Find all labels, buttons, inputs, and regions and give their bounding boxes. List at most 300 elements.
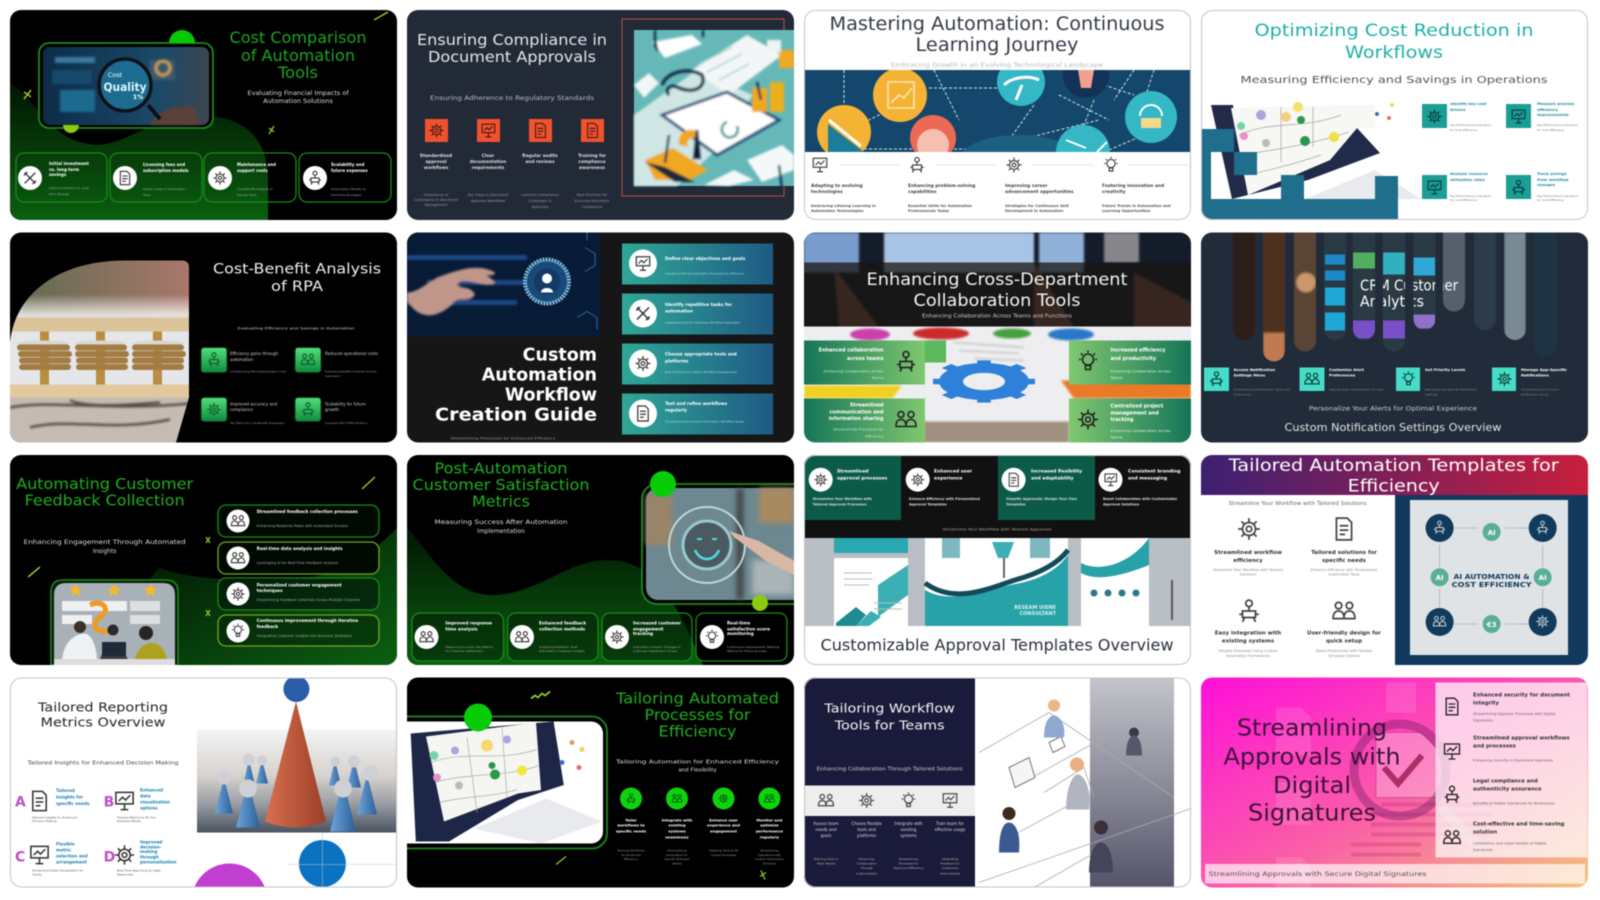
title: Document Approvals [428,48,596,66]
card: engagement tracking [602,613,692,661]
item: measure process: Key Performance Indicators [1537,123,1579,127]
item C: flexible metrics: selection and [56,854,88,858]
card: initial investment: term Savings [49,192,69,196]
item: measure process [1506,101,1579,132]
item: tailored solutions: Enhance Efficiency with Personalized [1311,568,1377,572]
item: adapting: Automation Technologies [811,209,864,213]
card: feedback collection [508,613,598,661]
image: brochure templates: CONSULTANT [1019,611,1057,617]
subtitle [615,760,780,774]
card: user experience [906,468,980,506]
item: tailored solutions: Automation Tools [1329,573,1360,577]
item: choose tools: Enhancing [859,857,875,861]
card: licensing fees: Tools [142,193,151,197]
item: tailor workflows: Efficiency [624,857,638,861]
card: branding: and messaging [1128,475,1167,481]
subtitle: Tailored Insights for Enhanced Decision Making [26,760,178,766]
item: tailor workflows [616,788,647,861]
item: career: Improving career [1005,183,1048,189]
title: Cost Comparison [230,28,366,47]
title [830,14,1164,56]
item D: personalization: decision- [140,844,162,850]
item: adapting: technologies [811,189,843,195]
title [823,700,955,732]
card: increased efficiency: Teams [1110,375,1123,380]
item: reduced costs: Evaluating Benefits of Robotic Process [325,370,377,374]
card: repetitive tasks [622,294,773,334]
icon: lime semicircle [63,125,79,133]
card: streamlined communication: communication and [829,410,884,416]
item: integrate systems: Streamlining [899,857,918,861]
image: laptop with workflow chart [387,716,607,848]
item: integrate systems: Automation for [666,853,689,857]
title [230,28,366,82]
item: reduced costs [295,348,378,378]
item B: data visualization: B [104,794,114,810]
item: app-specific notifications [1492,367,1568,396]
title: Enhancing Cross-Department [866,270,1128,290]
image: AI automation and cost efficiency board: AI [1539,574,1547,582]
card: real-time analysis: Leveraging AI for Real-Time Feedback Analysis [257,561,338,565]
panel: Tailored Reporting Metrics Overview [10,676,397,900]
image: hand touching smiley interface [642,484,812,604]
item: enhance experience: experience and [707,822,740,828]
item: adapting [811,158,876,213]
panel: Tailored Automation Templates for Efficiency [1201,455,1588,665]
item: integrate systems: Personalizing [667,848,687,852]
subtitle: Enhancing Engagement Through Automated [24,539,186,546]
card: approval processes [809,468,887,506]
item: standardized workflows [414,119,459,207]
icon: green circle [650,471,676,497]
card: scalability: One-Time Purchases [331,193,362,197]
panel: Custom Notification Settings Overview [1201,232,1588,442]
item: app-specific notifications: Manage App-Specific [1521,367,1568,372]
item: priority levels [1396,367,1478,396]
title [866,270,1128,311]
card: scalability: future expenses [331,168,368,173]
item D: personalization [104,840,177,876]
title: Approvals with [1224,744,1400,770]
item: access notification menu [1204,367,1290,396]
item: documentation requirements [468,119,509,203]
card: scalability: Subscription Models vs. [331,187,366,191]
card: enhanced collaboration: Teams [870,375,884,380]
subtitle: Tailoring Automation for Enhanced Efficiency [615,760,780,766]
item D: personalization: Responses [117,872,133,876]
title: Automating Customer [16,475,194,493]
item C: flexible metrics: Flexible [56,842,75,846]
subtitle: Measuring Efficiency and Savings in Operations [1240,75,1548,86]
card: centralized project management: tracking [1110,417,1134,423]
item: measure process: efficiency [1537,107,1558,112]
card: initial investment: Initial Investment vs. Long- [49,186,90,190]
item: innovation: Future Trends in Automation and [1102,204,1171,208]
subtitle: Implementation [477,528,525,535]
card: appropriate tools: Best Practices for Custom Workflow Development [665,370,738,374]
item: adapting: Embracing Lifelong Learning in [811,204,876,208]
item: tailored solutions: specific needs [1322,558,1367,564]
card: streamlined communication: Efficiency [865,434,884,438]
image: colleagues with gears on paper [804,232,1191,442]
title: Post-Automation [434,459,568,477]
title: Learning Journey [916,35,1079,56]
item: standardized workflows: Compliance in Document [414,198,459,202]
item: compliance training: Training for [578,153,607,159]
item C: flexible metrics: Streamlined Data Visualization for [32,868,84,872]
card: real-time analysis: Real-time data analysis and insights [257,546,343,551]
item: identify cost drivers: Key Performance Indicators [1450,123,1492,127]
item: cost-effective: Compliance and Legal Validity of Digital [1473,842,1546,846]
card: personalized engagement: Streamlining Feedback Collection Across Multiple Channels [257,598,360,602]
title: Customer Satisfaction [412,476,590,494]
panel: Cost Comparison of Automation Tools [10,10,397,220]
title: Feedback Collection [25,492,185,510]
item C: flexible metrics [15,842,88,876]
item: tailor workflows: Tailoring Workflows [616,848,645,852]
card: streamlined communication: Streamlining Processes for [833,426,884,432]
card: increased efficiency: Increased efficiency [1110,348,1166,354]
card: test and refine [622,394,773,434]
panel: Streamlining Approvals with Digital Signatures [1201,678,1588,888]
item: accuracy [201,398,284,425]
item: cost-effective: solution [1473,830,1497,836]
item: tailor workflows: specific needs [616,828,647,834]
item: assess needs: needs and [816,827,837,832]
image: magnifier over cost dashboard: 1% [133,94,143,101]
item: standardized workflows: workflows [424,165,449,171]
item: efficiency gains [201,348,287,374]
item: assess needs: Assess team [813,821,839,826]
item: customize alerts: Customize Alert [1329,367,1364,372]
item: enhanced security: integrity [1473,700,1499,706]
card: streamlined feedback: Enhancing Response Rates with Automated Surveys [257,524,348,528]
card: licensing fees: Licensing fees and [143,162,185,167]
card: define objectives [622,244,773,284]
item: career [1005,158,1074,213]
caption bar [1205,864,1585,884]
item: innovation: Learning Opportunities [1102,209,1151,213]
item: access notification menu: Access Notification [1234,367,1276,372]
card: increased efficiency: Enhancing Collaboration Across [1110,368,1171,374]
item: accuracy: Key Metrics for Cost-Benefit Assessment [230,421,284,425]
item: integrate systems: systems [668,828,687,834]
item: enhance experience: engagement [710,828,737,834]
card: user experience: Enhanced user [934,468,973,474]
item B: data visualization: visualization [140,800,170,804]
card: repetitive tasks: Integrating Tools for Seamless Workflow Automation [665,320,741,324]
item: easy integration [1215,600,1281,658]
image: magnifier over approved document [1276,682,1501,888]
item C: flexible metrics: Clarity [32,872,42,876]
title: Tailored Reporting [37,700,168,714]
item: legal compliance: Legal compliance and [1473,778,1538,784]
image: AI automation and cost efficiency board: €3 [1486,621,1497,629]
item: resource utilization: Analyze resource [1450,171,1488,176]
item A: tailored insights: insights for [56,794,84,800]
item: compliance training: Compliance [582,205,602,209]
item: workflow efficiency: Streamline Your Workflow with Tailored [1213,568,1283,572]
image: brochure templates: RESEAM UIENE [1014,605,1057,611]
item B: data visualization: options [140,806,158,810]
item: monitor performance: Solutions [763,862,777,866]
item: workflow efficiency: Streamlined workflow [1214,550,1282,556]
item: enhanced security: Streamlining Approval Processes with Digital [1473,712,1555,716]
card: satisfaction score: Metrics for Future Success [727,649,767,653]
image: team reviewing feedback with star ratings [51,580,178,665]
subtitle: Enhancing Collaboration Across Teams and Functions [922,314,1072,320]
item: tailored solutions: Tailored solutions for [1311,550,1377,556]
icon: lime circle [752,595,768,611]
card: streamlined feedback [218,505,379,537]
card: test and refine: Test and refine workflows [665,401,728,407]
panel: Mastering Automation [804,10,1191,220]
card: maintenance: Maintenance and [237,162,276,167]
item: access notification menu: Settings Menu [1234,372,1265,378]
card: initial investment: vs. long-term [49,167,79,172]
item: integrate systems: Processes for [899,862,919,866]
item A: tailored insights: A [15,794,26,810]
panel: Optimizing Cost Reduction [1201,10,1588,220]
item A: tailored insights: Tailored Insights for Enhanced [31,816,77,820]
item: easy integration: Automation Frameworks [1226,654,1270,658]
card: enhanced collaboration: Enhanced collaboration [819,348,884,354]
title: of RPA [271,279,323,295]
item: compliance training: awareness [579,165,605,171]
item: tailor workflows: Tailor [625,818,637,822]
title: Workflow [505,386,597,406]
card: continuous improvement: Integrating Customer Insights into Business Strategies [257,634,352,638]
image: hand touching AI interface [407,232,600,336]
image: magnifier over cost dashboard [39,43,213,128]
item: monitor performance: performance [756,828,783,834]
title: Processes for [644,706,751,724]
item: choose tools: Through [859,866,873,870]
item: access notification menu: Preferences [1234,392,1252,396]
item: choose tools: tools and [857,827,876,832]
card: response time: Improved response [445,620,492,626]
image: vertical slat photo with CRM analytics: Analytics [1360,292,1424,310]
card: user experience: Enhance Efficiency with Personalized [909,497,980,501]
title: Custom [523,346,597,366]
item: train team: Integrating [942,857,958,861]
item B: data visualization: Flexible Metrics to Fit Your [117,816,157,820]
card: personalized engagement: Personalized customer engagement [257,583,342,588]
item: resource utilization: for Cost Efficiency [1450,198,1477,202]
item: track savings: from workflow [1537,177,1569,182]
item: app-specific notifications: Notification Issues [1521,392,1549,396]
card: centralized project management: Centralized project [1110,404,1164,410]
title [1224,716,1400,826]
title [615,690,779,740]
title: Tools for Teams [833,718,945,732]
card: flexibility: and adaptability [1031,475,1074,481]
card: enhanced collaboration [804,340,925,384]
item: reduced costs: Automation [325,374,341,378]
item: assess needs: Team Needs [816,862,836,866]
item D: personalization: D [104,850,115,866]
card: engagement tracking: engagement [633,627,663,633]
item A: tailored insights: Decision Making [32,819,57,823]
card: streamlined communication: Streamlined [850,402,884,408]
item: integrate systems [893,821,924,870]
card: branding: Approval Solutions [1103,502,1139,506]
title: Digital [1273,773,1351,799]
item: workflow efficiency: efficiency [1233,558,1263,564]
title: of Automation [241,46,355,65]
card: centralized project management [1069,398,1191,442]
title: Collaboration Tools [914,291,1081,311]
item D: personalization: Improved [140,840,162,844]
item: priority levels: Settings [1425,392,1438,396]
item: scalability: Long-term ROI of RPA Solutions [325,421,368,425]
item C: flexible metrics: C [15,850,25,866]
image: team workflow illustration [979,678,1194,888]
item: resource utilization: Key Performance Indicators [1450,194,1492,198]
subtitle: Ensuring Adherence to Regulatory Standards [430,94,595,102]
panel: Tailoring Workflow Tools for Teams [804,678,1194,888]
card: test and refine: Troubleshooting Common Automation Workflow Issues [664,420,744,424]
card: approval processes: Tailored Approval Processes [813,502,866,506]
card: flexibility [1002,468,1082,506]
card: user experience: experience [934,475,963,481]
title [1228,456,1559,497]
item: enhance experience: Unique Processes [711,853,737,857]
title: Optimizing Cost Reduction in [1254,21,1534,41]
item: regular audits [521,119,559,209]
item: standardized workflows: Management [424,203,448,207]
item A: tailored insights: Tailored [56,788,75,793]
icon: green circle [464,704,492,732]
item: cost-effective [1444,822,1565,852]
item: efficiency gains: Efficiency gains through [230,351,279,356]
image: magnifier over cost dashboard: Cost [108,71,123,79]
item: regular audits: and reviews [525,159,555,165]
title: Tools [277,63,318,82]
title [213,262,381,295]
item: integrate systems: Needs [672,862,682,866]
title: Efficiency [1348,477,1440,497]
item: identify cost drivers [1422,101,1492,132]
card: branding: Boost Collaboration with Customizable [1103,497,1178,501]
item: regular audits: Approvals [531,205,549,209]
title [435,346,597,426]
item: app-specific notifications: Troubleshooting Common [1520,388,1559,392]
item: integrate systems: Maximum Efficiency [893,866,924,870]
icon: green semicircle [169,30,195,43]
title: Custom Notification Settings Overview [1284,422,1502,434]
title: Streamlining [1237,716,1387,742]
item: app-specific notifications: Notifications [1521,372,1550,378]
item: enhanced security: Enhanced security for document [1473,692,1570,698]
item: documentation requirements: Approval Workflows [471,199,505,203]
item: choose tools: platforms [857,833,876,838]
card: approval processes: approval processes [837,475,887,481]
card: engagement tracking: Customer Satisfaction Scores [633,649,677,653]
item: user-friendly design: Template Options [1327,654,1360,658]
card: define objectives: Define clear objectives and goals [665,256,746,262]
item: legal compliance: authenticity assurance [1473,786,1542,792]
item: workflow efficiency [1213,518,1283,577]
item: user-friendly design: User-friendly design for [1307,631,1381,637]
card: feedback collection: Analyzing Feedback: Post- [539,645,578,649]
card: licensing fees: subscription models [143,168,189,173]
title: Tailoring Workflow [823,700,955,716]
card: increased efficiency: and productivity [1110,356,1157,362]
card: flexibility: Increased flexibility [1031,468,1082,474]
item D: personalization: Real-Time Reporting for Agile [117,868,161,872]
item: documentation requirements: Key Steps in Document [468,193,509,197]
title: Ensuring Compliance in [417,31,607,49]
image: vertical slat photo with CRM analytics [1233,232,1558,362]
item: problem solving: capabilities [908,189,937,195]
title: Automation [482,366,597,386]
title: Workflows [1345,43,1443,63]
title: Cost-Benefit Analysis [213,262,381,278]
title: Customizable Approval Templates Overview [820,636,1174,655]
item: train team: Feedback for [940,862,960,866]
panel: Automating Customer Feedback Collection [10,455,397,665]
panel: Ensuring Compliance in Document Approvals [407,10,794,220]
item: priority levels: Set Priority Levels [1425,367,1466,372]
card: define objectives: Designing Tailored Automation Processes for Efficiency [665,272,744,276]
item: problem solving: Enhancing problem-solving [908,183,975,189]
item: scalability [295,398,368,425]
item B: data visualization: Business Needs [117,819,141,823]
item: compliance training: Best Practices for [577,193,608,197]
item: choose tools: Customization [856,872,877,876]
item: integrate systems: Integrate with [662,818,693,822]
item: integrate systems: existing [668,822,686,828]
item: career: Strategies for Continuous Skill [1005,204,1069,208]
item: choose tools: Choose flexible [851,821,882,826]
item: regular audits: Common Compliance [521,193,559,197]
item: documentation requirements: documentation [470,159,506,165]
card: test and refine: regularly [665,408,687,414]
card: real-time analysis [218,542,379,574]
item: easy integration: Simplify Processes Using Custom [1218,649,1278,653]
title: Metrics Overview [40,714,166,730]
item C: flexible metrics: metric [56,848,72,852]
item: scalability: Scalability for future [325,402,366,406]
subtitle: Personalize Your Alerts for Optimal Experience [1309,404,1477,412]
subtitle: Enhancing Collaboration Through Tailored Solutions [817,766,963,772]
card: increased efficiency [1069,340,1191,384]
item: access notification menu: Understanding Notification Types and [1234,388,1290,392]
card: response time [412,613,504,661]
item: priority levels: Managing App-Specific Notification [1425,388,1478,392]
panel: Custom Automation Workflow Creation Guide [407,232,794,442]
card: engagement tracking: Automation Impact: Changes in [633,645,681,649]
card: flexibility: Simplify Approvals: Design Your Own [1006,497,1078,501]
item: user-friendly design [1307,602,1381,658]
item: integrate systems: systems [900,833,917,838]
item: accuracy: Improved accuracy and [230,402,278,406]
item: innovation [1102,157,1171,213]
item: compliance training [575,119,610,209]
item: efficiency gains: Understanding RPA Implementation Costs [230,370,287,374]
card: maintenance: Popular Tools [237,193,257,197]
subtitle: and Flexibility [678,768,717,774]
item: integrate systems [662,788,693,866]
item: accuracy: compliance [230,407,253,412]
item D: personalization: through [140,854,159,860]
subtitle: Streamline Your Workflow with Tailored Approvals [942,527,1052,532]
item: train team: effective usage [935,827,966,832]
item: integrate systems: seamlessly [665,834,689,840]
item: choose tools [851,821,882,876]
title: Creation Guide [435,406,597,426]
